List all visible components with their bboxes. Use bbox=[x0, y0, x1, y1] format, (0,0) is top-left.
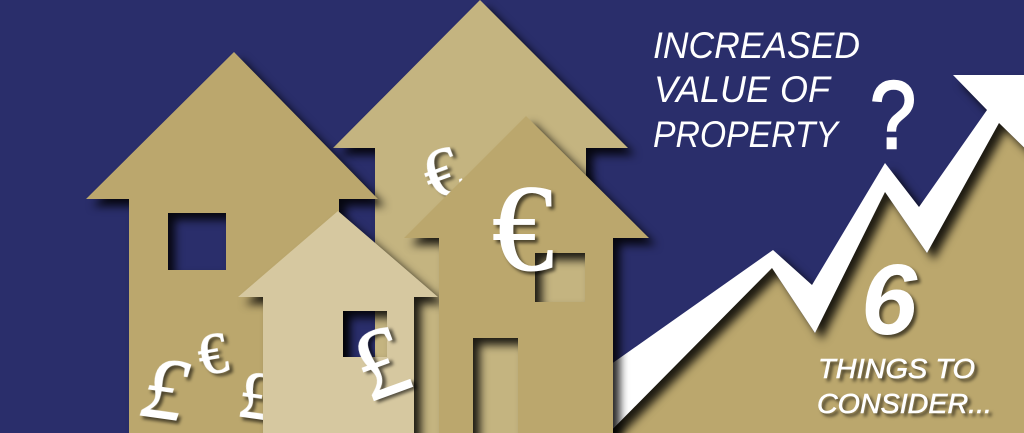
question mark: ? bbox=[870, 62, 916, 169]
front right house with window and door bbox=[404, 116, 649, 433]
euro small on left house: € bbox=[193, 319, 233, 388]
back house bbox=[333, 0, 628, 433]
number six: 6 bbox=[861, 244, 918, 356]
headline line 1: INCREASED bbox=[653, 25, 860, 66]
headline line 3: PROPERTY bbox=[653, 114, 840, 155]
large left house with window bbox=[86, 52, 378, 433]
small pale house with window bbox=[238, 211, 438, 433]
caption line 1: THINGS TO bbox=[818, 353, 975, 384]
headline bbox=[653, 25, 860, 155]
caption line 2: CONSIDER... bbox=[817, 388, 992, 419]
euro on back house: € bbox=[413, 132, 472, 216]
rising gold area under arrow bbox=[590, 123, 1024, 433]
large euro on front house: € bbox=[492, 160, 554, 297]
white rising arrow bbox=[590, 75, 1024, 433]
pound small on left house: £ bbox=[234, 355, 278, 433]
headline line 2: VALUE OF bbox=[654, 69, 832, 110]
things to consider caption bbox=[817, 353, 992, 419]
pound on pale house: £ bbox=[338, 302, 423, 423]
